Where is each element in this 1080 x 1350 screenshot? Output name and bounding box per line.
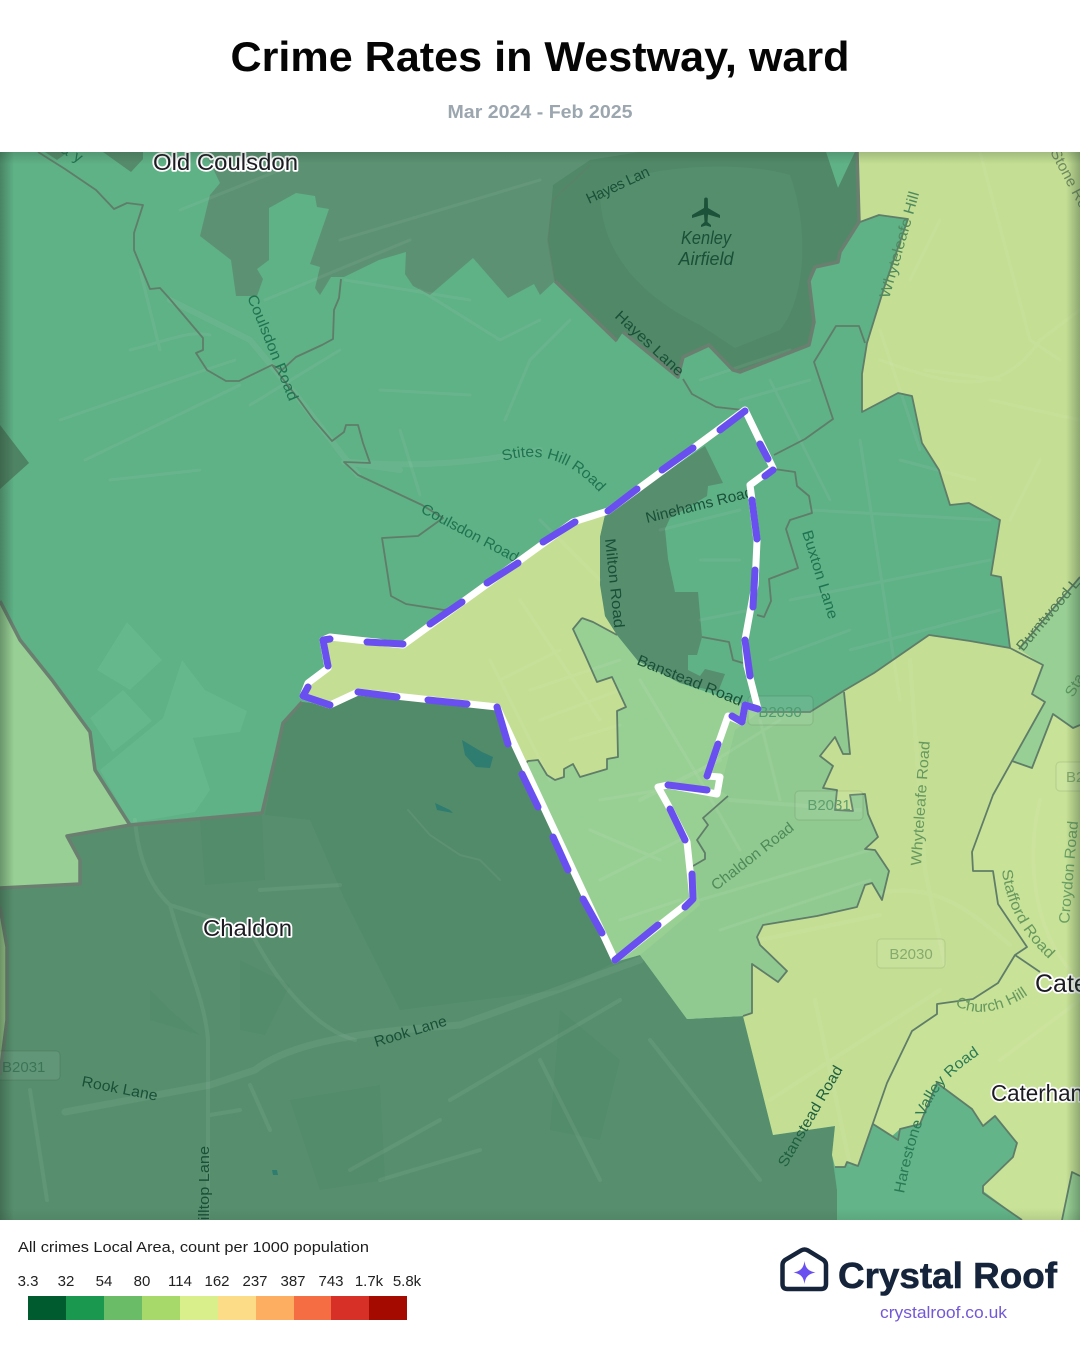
region: yellow-green north east — [858, 152, 1080, 649]
legend value labels: 80 — [134, 1273, 150, 1290]
legend title: All crimes Local Area, count per 1000 population — [18, 1239, 369, 1256]
road number badges: B2030 — [889, 946, 933, 963]
legend value labels: 3.3 — [18, 1273, 38, 1290]
road labels: Chaldon Road — [708, 819, 797, 894]
road labels: Burntwood L — [1013, 575, 1080, 655]
icon: airport plane — [692, 198, 720, 227]
legend value labels: 32 — [58, 1273, 74, 1290]
road number badges — [0, 696, 1080, 1080]
road labels: Church Hill — [957, 986, 1028, 1012]
legend value labels: 162 — [204, 1273, 230, 1290]
region: Kenley airfield inner — [600, 167, 802, 348]
road number badges: B2031 — [2, 1059, 45, 1076]
region: Kenley airfield — [548, 152, 859, 377]
legend value labels: 114 — [168, 1273, 192, 1290]
legend value labels: 5.8k — [393, 1273, 422, 1290]
place labels: Chaldon — [203, 915, 292, 941]
region: Westway dark green part — [600, 446, 725, 692]
map edge shading — [0, 152, 1080, 1220]
road labels: Rook Lane — [80, 1073, 159, 1105]
road labels: Ninehams Road — [644, 484, 755, 527]
region: yellow-green south east — [743, 635, 1045, 1167]
water: ponds — [272, 740, 493, 1175]
region: light green corner — [1062, 1172, 1080, 1220]
logo: Crystal Roof — [782, 1250, 1058, 1322]
place labels: Old Coulsdon — [153, 149, 298, 175]
legend value labels: 387 — [280, 1273, 306, 1290]
region: lighter medium-green patches west — [90, 622, 247, 823]
region: Chaldon darker woodland — [302, 702, 312, 704]
road labels: Rook Lane — [372, 1013, 449, 1051]
legend value labels: 1.7k — [355, 1273, 384, 1290]
website url: crystalroof.co.uk — [880, 1304, 1008, 1322]
road labels: Milton Road — [601, 538, 627, 629]
legend value labels: 743 — [318, 1273, 344, 1290]
road number badges: B2030 — [758, 704, 802, 721]
label: Kenley Airfield: Airfield — [678, 249, 734, 269]
subtitle: date range: Mar 2024 - Feb 2025 — [448, 102, 632, 122]
label: Kenley Airfield: Kenley — [681, 228, 732, 248]
title: Crime Rates in Westway, ward — [230, 33, 850, 80]
road labels: Stites Hill Road — [502, 446, 606, 492]
legend value labels: 54 — [96, 1273, 112, 1290]
ward boundaries — [0, 152, 1080, 1220]
region: light green west — [0, 601, 130, 888]
road labels: Stanstead Road — [775, 1063, 846, 1170]
legend — [18, 1239, 422, 1320]
road labels: Coulsdon Road — [418, 501, 521, 566]
road labels: Whyteleafe Hill — [877, 190, 923, 300]
road labels: Coulsdon Road — [243, 292, 301, 403]
road labels: Hilltop Lane — [196, 1146, 213, 1232]
legend value labels — [18, 1273, 422, 1290]
region: west edge light strip — [0, 918, 6, 1060]
road labels — [61, 152, 1080, 1272]
road labels: Hayes Lane — [611, 307, 687, 380]
logo wordmark: Crystal Roof — [838, 1255, 1058, 1296]
legend colour scale — [28, 1296, 407, 1320]
region: dark west edge — [0, 425, 29, 489]
place labels — [153, 149, 1080, 1106]
region: Westway yellow-green part — [303, 515, 626, 780]
road labels: Hayes Lan — [584, 163, 652, 208]
icon: house with star — [782, 1250, 826, 1289]
Westway ward outline — [303, 410, 773, 960]
road labels: Banstead Road — [635, 652, 745, 710]
region: light green central — [527, 619, 760, 1019]
region: yellow-green Caterham — [858, 714, 1080, 1220]
road network — [30, 152, 1080, 1220]
region: medium green Harestone — [859, 1084, 1016, 1190]
shape: Chaldon woodland patches — [150, 815, 620, 1190]
region: dark green Chaldon south — [0, 692, 837, 1220]
road labels: Whyteleafe Road — [908, 740, 934, 866]
road labels: Buxton Lane — [798, 528, 841, 621]
region: light green strip east — [1012, 577, 1080, 768]
road labels: ay — [58, 141, 86, 167]
region: slightly darker green east — [640, 955, 741, 1019]
road labels: Harestone Valley Road — [894, 1046, 979, 1192]
region: dark wedges top-left — [45, 152, 143, 172]
road number badges: B2031 — [807, 797, 851, 814]
legend value labels: 237 — [242, 1273, 268, 1290]
region: dark green north band — [200, 152, 639, 298]
road labels: Stafford Road — [1002, 870, 1056, 958]
label: Kenley Airfield — [678, 230, 734, 265]
